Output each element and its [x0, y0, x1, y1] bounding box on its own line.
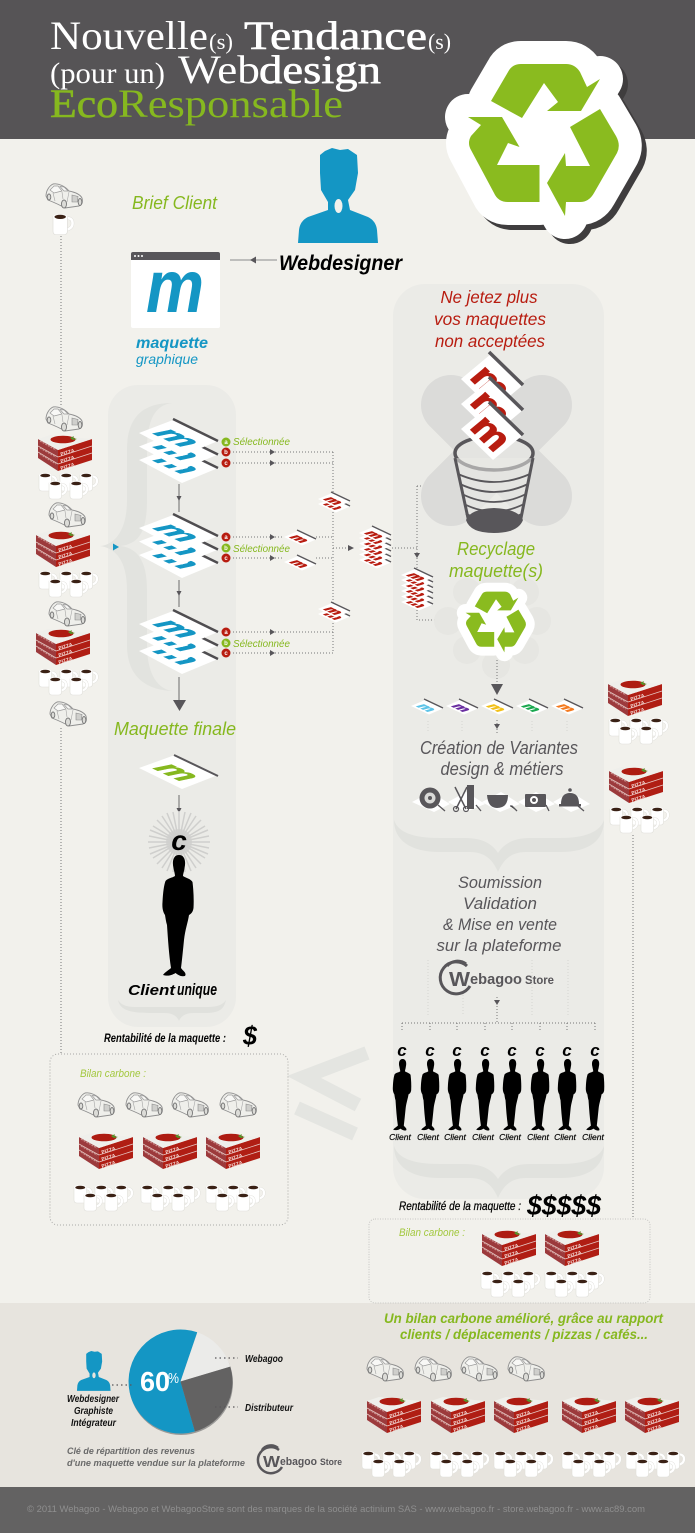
icon: starburst	[148, 811, 210, 873]
panel: carbon footprint right	[369, 1219, 650, 1303]
title	[50, 13, 451, 126]
icon: small webdesigner	[77, 1351, 111, 1391]
header band	[0, 0, 695, 139]
clients row: c	[397, 1041, 407, 1060]
heading: recycling: maquette(s)	[449, 561, 543, 581]
profitability: single client: $	[242, 1021, 258, 1051]
heading: submission: Soumission	[458, 874, 542, 892]
connector: platform to clients	[402, 960, 595, 1032]
panel: single client path	[100, 385, 236, 1027]
clients row: c	[425, 1041, 435, 1060]
heading: variants	[420, 738, 578, 779]
heading: improved footprint	[384, 1310, 664, 1342]
rejected sheets: first pile	[359, 526, 391, 568]
caption: revenue split	[67, 1446, 246, 1469]
logo: Webagoo Store small	[258, 1445, 342, 1473]
right column: resource icons	[608, 680, 668, 1219]
clients row: Client	[472, 1132, 495, 1142]
clients row: c	[507, 1041, 517, 1060]
footer text: © 2011 Webagoo - Webagoo et WebagooStore sont des marques de la société actinium SAS - www.webagoo.fr - store.webagoo.fr - www.ac89.com	[27, 1504, 645, 1515]
icon: less or equal sign	[297, 1053, 367, 1134]
icon: flower behind small recycling	[434, 567, 551, 679]
heading: submission: & Mise en vente	[443, 916, 557, 934]
icon: big recycling sticker	[468, 64, 624, 221]
title: (pour un)	[50, 57, 165, 90]
footer band	[0, 1487, 695, 1533]
clients row: Client	[389, 1132, 412, 1142]
badges: first round: b	[224, 450, 228, 456]
title: (s)	[428, 29, 451, 54]
panel: carbon footprint left: Bilan carbone :	[80, 1068, 146, 1080]
label: client unique	[128, 980, 217, 999]
badges: third round: b	[224, 641, 228, 647]
title: Nouvelle	[50, 13, 208, 58]
clients row: c	[535, 1041, 545, 1060]
badges: third round: a	[224, 630, 228, 636]
heading: recycling: Recyclage	[457, 539, 535, 559]
heading: do not throw away: non acceptées	[435, 331, 545, 351]
label: maquette graphique	[136, 335, 208, 367]
clients row: Client	[417, 1132, 440, 1142]
clients row: Client	[582, 1132, 605, 1142]
label: maquette graphique: graphique	[136, 351, 198, 367]
pie chart: revenue split: %	[168, 1370, 179, 1387]
logo: Webagoo Store	[440, 961, 554, 994]
pie legend: roles: Intégrateur	[71, 1418, 117, 1429]
badges: second round: b	[224, 546, 228, 552]
profitability: platform	[399, 1190, 601, 1221]
badges: first round: Sélectionnée	[233, 436, 290, 448]
pie chart: revenue split	[129, 1330, 233, 1435]
sheets: first round	[139, 419, 218, 483]
sheets: second round	[139, 514, 218, 578]
heading: submission	[436, 874, 562, 955]
variants: coloured sheets	[411, 699, 583, 714]
icon: maquette window: m	[146, 245, 204, 328]
label: client unique: Client	[128, 982, 176, 999]
profitability: platform: $$$$$	[526, 1190, 601, 1221]
title: (s)	[209, 29, 233, 54]
rejected sheets: second pile	[401, 568, 433, 610]
pie legend: roles	[67, 1394, 120, 1429]
profitability: single client: Rentabilité de la maquette :	[104, 1031, 226, 1045]
arrow: webdesigner to maquette	[230, 256, 277, 264]
icon: unique client: c	[171, 825, 187, 856]
badges: second round: a	[224, 535, 228, 541]
clients row: Client	[444, 1132, 467, 1142]
badges: second round	[222, 532, 290, 562]
heading: do not throw away	[434, 287, 546, 351]
arrow: recycling to variants	[491, 660, 503, 695]
clients row: Client	[527, 1132, 550, 1142]
icon: cross background	[451, 405, 542, 496]
logo: Webagoo Store: ebagoo	[470, 971, 522, 988]
icon: webdesigner	[298, 148, 378, 243]
arrow: variants	[428, 720, 567, 733]
label: maquette graphique: maquette	[136, 335, 208, 352]
heading: recycling	[449, 539, 543, 581]
icons: business variants	[412, 785, 590, 812]
badges: first round: c	[224, 461, 228, 467]
icon: small recycling sticker	[466, 592, 526, 652]
pie legend: roles: Graphiste	[74, 1406, 113, 1417]
title: Web	[178, 47, 260, 92]
panel: carbon footprint left	[50, 1054, 288, 1225]
clients row	[389, 1041, 605, 1142]
logo: Webagoo Store small: W	[263, 1454, 281, 1471]
heading: submission: sur la plateforme	[436, 937, 562, 955]
logo: Webagoo Store small: Store	[320, 1457, 342, 1467]
sheet: final mockup	[139, 755, 218, 789]
pie legend: Webagoo: Webagoo	[245, 1354, 283, 1365]
flow connectors	[173, 449, 457, 822]
clients row: c	[562, 1041, 572, 1060]
badges: third round: c	[224, 651, 228, 657]
heading: submission: Validation	[463, 895, 537, 913]
title: design	[259, 47, 381, 92]
bottom band	[0, 1303, 695, 1487]
badges: first round: a	[224, 440, 228, 446]
icon: unique client	[162, 825, 194, 976]
badges: first round	[222, 436, 290, 468]
title: Eco	[50, 81, 118, 126]
clients row: Client	[499, 1132, 522, 1142]
logo: Webagoo Store small: ebagoo	[280, 1456, 317, 1468]
pie chart: revenue split: 60	[140, 1366, 170, 1397]
panel: carbon footprint right: Bilan carbone :	[399, 1227, 465, 1239]
heading: variants: design & métiers	[440, 759, 564, 779]
profitability: platform: Rentabilité de la maquette :	[399, 1199, 521, 1213]
label: webdesigner: Webdesigner	[279, 252, 404, 275]
panel: recycling path	[393, 284, 604, 1199]
left column: first car and coffee	[46, 184, 82, 405]
label: brief client: Brief Client	[132, 193, 218, 213]
heading: improved footprint: clients / déplacements / pizzas / cafés...	[400, 1326, 648, 1342]
clients row: c	[590, 1041, 600, 1060]
marker: blue triangle	[113, 544, 119, 550]
heading: variants: Création de Variantes	[420, 738, 578, 758]
label: client unique: unique	[177, 980, 217, 999]
logo: Webagoo Store: W	[449, 969, 470, 991]
label: final mockup: Maquette finale	[114, 719, 236, 739]
caption: revenue split: d'une maquette vendue sur la plateforme	[67, 1458, 246, 1469]
caption: revenue split: Clé de répartition des revenus	[67, 1446, 195, 1457]
badges: third round	[222, 628, 290, 658]
badges: second round: Sélectionnée	[233, 543, 290, 555]
title: Tendance	[244, 13, 427, 58]
logo: Webagoo Store: Store	[525, 975, 554, 987]
left column: resource icons	[36, 407, 97, 1054]
sheets: third round	[139, 610, 218, 674]
heading: do not throw away: vos maquettes	[434, 309, 546, 329]
profitability: single client	[104, 1021, 258, 1051]
resources: reduced footprint	[362, 1357, 684, 1477]
icon: waste bin	[455, 436, 533, 533]
clients row: c	[452, 1041, 462, 1060]
icon: rejected sheets falling in the bin	[461, 352, 523, 460]
sheet: final mockup: m	[146, 759, 208, 785]
heading: do not throw away: Ne jetez plus	[440, 287, 538, 307]
clients row: c	[480, 1041, 490, 1060]
heading: improved footprint: Un bilan carbone amélioré, grâce au rapport	[384, 1310, 664, 1326]
pie legend: leader lines	[112, 1358, 238, 1407]
title: Responsable	[118, 81, 343, 126]
pie legend: roles: Webdesigner	[67, 1394, 120, 1405]
badges: third round: Sélectionnée	[233, 638, 290, 650]
rejected sheets: small stacks	[284, 492, 350, 622]
badges: second round: c	[224, 556, 228, 562]
clients row: Client	[554, 1132, 577, 1142]
pie legend: Distributeur: Distributeur	[245, 1403, 294, 1414]
